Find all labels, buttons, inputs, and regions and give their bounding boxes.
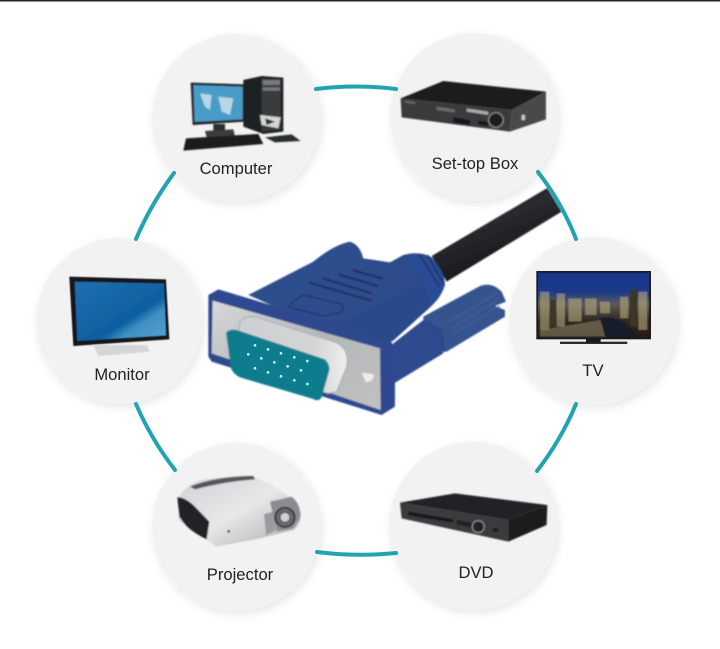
- icon: computer: [183, 76, 301, 151]
- teal insert with pins: [226, 330, 329, 400]
- icon: set-top box: [401, 81, 546, 132]
- thumbscrew: [423, 285, 506, 360]
- circle: monitor: [36, 238, 202, 404]
- icon: monitor: [69, 277, 169, 356]
- connector pins: [247, 344, 309, 385]
- icon: TV: [536, 271, 651, 344]
- VGA connector and cable: [208, 188, 562, 415]
- top edge line: [0, 0, 720, 2]
- label: TV: TV: [582, 361, 604, 380]
- label: Monitor: Monitor: [94, 365, 150, 384]
- circle: computer: [152, 34, 320, 202]
- icon: projector: [177, 476, 301, 547]
- cable: [432, 188, 562, 282]
- front frame: [208, 289, 395, 415]
- screw: [362, 373, 374, 383]
- circle: DVD: [389, 442, 557, 610]
- label: Computer: Computer: [200, 159, 273, 178]
- lower barrel: [393, 320, 443, 383]
- label: Projector: Projector: [207, 565, 274, 584]
- icon: DVD player: [400, 493, 547, 542]
- D-sub shell: [233, 316, 347, 393]
- hood: [248, 242, 445, 345]
- circle: set-top box: [390, 33, 558, 201]
- connecting ring: [136, 86, 576, 555]
- circle: projector: [152, 443, 320, 611]
- circle: TV: [509, 237, 677, 405]
- metal plate: [212, 301, 381, 410]
- label: DVD: DVD: [458, 563, 494, 582]
- label: Set-top Box: Set-top Box: [432, 154, 519, 173]
